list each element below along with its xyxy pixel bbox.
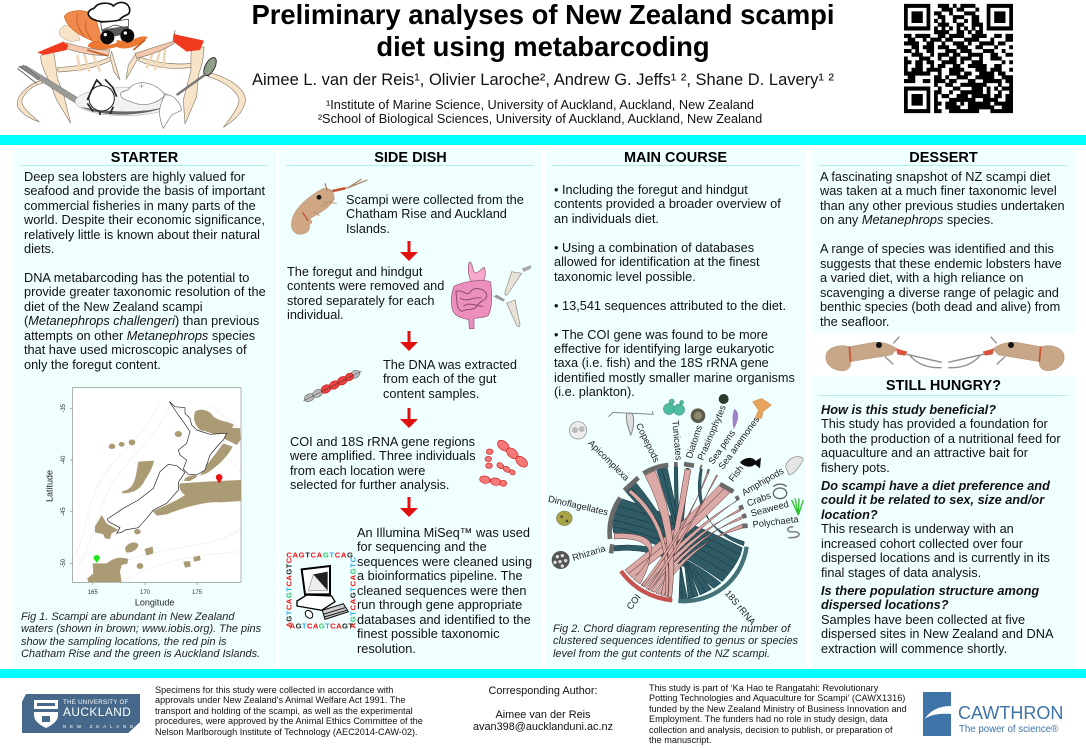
chart: scampi distribution map: 170 bbox=[140, 590, 151, 596]
text: ethics statement: approvals under New Zealand's Animal Welfare Act 1991. The bbox=[155, 695, 405, 705]
chart: scampi distribution map: -45 bbox=[61, 507, 67, 516]
icon: diatom bbox=[691, 408, 705, 423]
cyan divider: bottom bbox=[0, 669, 1086, 678]
chart: chord diagram: 18S rRNA bbox=[723, 588, 758, 627]
text: dessert: A range of species was identified and this bbox=[820, 241, 1054, 256]
heading: main course: MAIN COURSE bbox=[624, 150, 727, 166]
arrow 2 bbox=[400, 331, 418, 351]
text: main course bullets: effective for identifying large eukaryotic bbox=[554, 341, 774, 356]
text: metabarcoding: DNA metabarcoding has the potential to bbox=[24, 270, 249, 285]
text: starter intro: relatively little is known about their natural bbox=[24, 227, 260, 242]
heading: dessert: DESSERT bbox=[909, 150, 978, 166]
text: dessert: the seafloor. bbox=[820, 314, 889, 329]
text: corresponding author: Aimee van der Reis bbox=[495, 709, 591, 721]
text: starter intro: seafood and provide the basis of important bbox=[24, 183, 265, 198]
text: ethics statement bbox=[155, 685, 423, 737]
text: corresponding author bbox=[473, 685, 613, 733]
text: step 5 bbox=[357, 525, 532, 656]
icon: scampi bbox=[291, 178, 368, 235]
chart: scampi distribution map: -40 bbox=[61, 455, 67, 464]
heading: still hungry: STILL HUNGRY? bbox=[886, 378, 1001, 394]
icon: sea anemone bbox=[752, 398, 772, 418]
text: step 4: from each location were bbox=[290, 463, 425, 478]
caption: figure 2 bbox=[553, 623, 798, 660]
text: step 2: stored separately for each bbox=[287, 293, 434, 308]
panel: dessert bbox=[812, 149, 1075, 333]
chart: chord diagram: Apicomplexa bbox=[586, 438, 632, 483]
text: dessert: benthic species (both dead and alive) from bbox=[820, 299, 1060, 314]
text: corresponding author: Corresponding Author: bbox=[488, 685, 597, 697]
chart: chord diagram: Fish bbox=[727, 464, 745, 484]
title: diet using metabarcoding bbox=[376, 31, 710, 62]
chart: chord diagram: Crabs bbox=[745, 490, 773, 509]
logo: New Zealand: NEW ZEALAND bbox=[63, 724, 137, 729]
caption: figure 2: Fig 2. Chord diagram representing the number of bbox=[553, 623, 790, 635]
text: funding statement bbox=[649, 683, 907, 745]
icon: two scampi facing each other bbox=[826, 336, 1064, 371]
logo: University of Auckland bbox=[22, 694, 140, 733]
text: dessert: a varied diet, with a high reliance on bbox=[820, 270, 1023, 285]
text: metabarcoding: that have used microscopic analyses of bbox=[24, 342, 247, 357]
text: step 5: databases and identified to the bbox=[357, 612, 531, 627]
icon: copepod bbox=[608, 411, 653, 435]
chart: chord diagram: Polychaeta bbox=[752, 514, 800, 530]
text: main course bullets: • The COI gene was found to be more bbox=[554, 327, 768, 342]
text: metabarcoding: diet of the New Zealand scampi bbox=[24, 299, 203, 314]
icon: computer with sequence border: AGTCAGTCAGTC bbox=[285, 557, 294, 628]
heading: side dish: SIDE DISH bbox=[374, 150, 447, 166]
text: step 3: from each of the gut bbox=[383, 371, 496, 386]
icon: computer with sequence border bbox=[285, 551, 358, 630]
text: question 1: This study has provided a foundation for bbox=[821, 416, 1048, 431]
text: main course bullets: • Including the foregut and hindgut bbox=[554, 182, 748, 197]
text: main course bullets: taxonomic level possible. bbox=[554, 269, 696, 284]
icon: polychaete bbox=[788, 527, 799, 538]
text: question 2: final stages of data analysis. bbox=[821, 565, 981, 580]
text: question 3: Samples have been collected at five bbox=[821, 612, 1025, 627]
logo wordmark: THE UNIVERSITY OF bbox=[63, 699, 129, 706]
text: step 2: contents were removed and bbox=[287, 278, 444, 293]
text: main course bullets bbox=[554, 182, 795, 399]
caption: figure 1 bbox=[21, 611, 261, 660]
panel: starter bbox=[13, 149, 276, 668]
text: main course bullets: an individuals diet. bbox=[554, 211, 659, 226]
text: step 5: for sequencing and the bbox=[357, 539, 487, 554]
text: metabarcoding: provide greater taxonomic resolution of the bbox=[24, 284, 266, 299]
text: step 1: Scampi were collected from the bbox=[346, 192, 524, 207]
heading rule bbox=[286, 165, 534, 166]
text: step 1: Chatham Rise and Auckland bbox=[346, 206, 507, 221]
text: funding statement: funded by the New Zealand Ministry of Business Innovation and bbox=[649, 704, 907, 714]
caption: figure 1: Fig 1. Scampi are abundant in New Zealand bbox=[21, 611, 234, 623]
text: question 1: aquaculture and an attractive bait for bbox=[821, 445, 1028, 460]
chart: chord diagram: Rhizaria bbox=[571, 543, 607, 563]
text: main course bullets: • Using a combination of databases bbox=[554, 240, 754, 255]
text: step 3 bbox=[383, 357, 517, 401]
chart: scampi distribution map: 175 bbox=[192, 590, 203, 596]
text: dessert: on any Metanephrops species. bbox=[820, 212, 994, 227]
logo: Cawthron bbox=[923, 692, 1063, 736]
heading rule bbox=[819, 395, 1067, 396]
text: ethics statement: Nelson Marlborough Institute of Technology (AEC2014-CAW-02). bbox=[155, 727, 418, 737]
icon: apicomplexa bbox=[569, 422, 587, 439]
chart: chord diagram: Prasinophytes bbox=[696, 403, 728, 462]
heading: starter: STARTER bbox=[111, 150, 178, 166]
text: metabarcoding: (Metanephrops challengeri) than previous bbox=[24, 313, 259, 328]
text: metabarcoding: only the foregut content. bbox=[24, 357, 161, 372]
text: step 5: finest possible taxonomic bbox=[357, 626, 499, 641]
icon: amplified DNA bbox=[479, 440, 528, 487]
text: dessert: than any other previous studies undertaken bbox=[820, 198, 1065, 213]
text: step 4: selected for further analysis. bbox=[290, 477, 449, 492]
logo: Auckland: AUCKLAND bbox=[63, 705, 131, 719]
text: step 2: individual. bbox=[287, 307, 344, 322]
icon: amphipod bbox=[786, 457, 803, 475]
text: question 3 bbox=[821, 583, 1054, 656]
icon: crab bbox=[773, 484, 787, 499]
affiliations: ¹Institute of Marine Science, University of Auckland, Auckland, New Zealand bbox=[326, 97, 754, 112]
text: corresponding author: avan398@aucklanduni.ac.nz bbox=[473, 721, 613, 733]
chart: chord diagram: Diatoms bbox=[684, 424, 704, 460]
chart: chord diagram: Tunicates bbox=[670, 420, 684, 461]
text: funding statement: Potting Technologies and Aquaculture for Scampi’ (CAWX1316) bbox=[649, 693, 905, 703]
text: funding statement: Employment. The funders had no role in study design, data bbox=[649, 714, 888, 724]
heading rule bbox=[20, 165, 268, 166]
icon: radiolarian bbox=[552, 551, 570, 569]
icon: dinoflagellate bbox=[556, 511, 572, 526]
icon: gut and sample tubes bbox=[451, 262, 532, 329]
caption: figure 2: level from the gut contents of the NZ scampi. bbox=[553, 648, 770, 660]
icon: fish bbox=[740, 458, 761, 468]
heading rule bbox=[551, 165, 799, 166]
icon: computer with sequence border: AGTCAGTCAGT bbox=[290, 621, 353, 630]
caption: figure 1: show the sampling locations, the red pin is bbox=[21, 636, 226, 648]
text: main course bullets: identified mostly smaller marine organisms bbox=[554, 370, 795, 385]
North Island outline bbox=[169, 402, 227, 475]
chart: chord diagram: Copepods bbox=[634, 421, 662, 464]
text: question 2: Do scampi have a diet preference and bbox=[821, 478, 1050, 493]
affiliations: ²School of Biological Sciences, University of Auckland, Auckland, New Zealand bbox=[318, 111, 762, 126]
text: dessert: scavenging a diverse range of pelagic and bbox=[820, 285, 1059, 300]
text: main course bullets: contents provided a broader overview of bbox=[554, 196, 781, 211]
chart: chord diagram: COI bbox=[625, 592, 643, 612]
text: starter intro: world. Despite their economic significance, bbox=[24, 212, 265, 227]
panel: still hungry bbox=[812, 376, 1075, 668]
text: question 2: dispersed locations and is currently in its bbox=[821, 550, 1050, 565]
text: step 3: The DNA was extracted bbox=[383, 357, 517, 372]
icon: sea pen bbox=[732, 409, 738, 429]
logo crest bbox=[34, 700, 58, 728]
affiliations bbox=[318, 97, 762, 126]
icon: tunicates bbox=[663, 399, 685, 415]
text: step 4 bbox=[290, 434, 475, 492]
chart: chord diagram bbox=[547, 394, 804, 627]
arrow 1 bbox=[400, 241, 418, 261]
cyan divider: top bbox=[0, 135, 1086, 145]
illustration: chef scampi with fork, spoon and plate bbox=[16, 2, 246, 129]
text: question 3: dispersed sites in New Zealand and DNA bbox=[821, 626, 1053, 641]
text: funding statement: collection and analysis, decision to publish, or preparation of bbox=[649, 725, 892, 735]
text: main course bullets: allowed for identification at the finest bbox=[554, 254, 760, 269]
heading rule bbox=[819, 165, 1067, 166]
text: step 4: were amplified. Three individuals bbox=[290, 448, 475, 463]
chart: scampi distribution map: Longitude bbox=[135, 598, 174, 608]
text: metabarcoding: attempts on other Metanephrops species bbox=[24, 328, 255, 343]
text: question 2: increased cohort collected over four bbox=[821, 536, 1023, 551]
chords to COI bbox=[614, 469, 743, 598]
chart: chord diagram: Sea pens bbox=[706, 428, 737, 466]
text: metabarcoding bbox=[24, 270, 266, 372]
text: ethics statement: procedures, were approved by the Animal Ethics Committee of the bbox=[155, 716, 423, 726]
QR code bbox=[904, 4, 1013, 114]
arrow 4 bbox=[400, 497, 418, 517]
text: step 5: cleaned sequences were then bbox=[357, 583, 526, 598]
text: question 3: Is there population structure among bbox=[821, 583, 1039, 598]
South Island outline bbox=[107, 464, 185, 533]
logo name: CAWTHRON bbox=[958, 703, 1063, 723]
icon: prasinophyte bbox=[719, 394, 729, 404]
text: dessert: was taken at a much finer taxonomic level bbox=[820, 183, 1057, 198]
icon: DNA helix bbox=[303, 370, 362, 402]
chart: scampi distribution map: -35 bbox=[61, 403, 67, 413]
text: dessert: A fascinating snapshot of NZ scampi diet bbox=[820, 169, 1050, 184]
text: question 1 bbox=[821, 402, 1061, 475]
text: dessert: suggests that these endemic lobsters have bbox=[820, 256, 1062, 271]
arrow 3 bbox=[400, 408, 418, 428]
icon: seaweed bbox=[792, 498, 803, 515]
text: step 5: sequences were cleaned using bbox=[357, 554, 532, 569]
text: starter intro: Deep sea lobsters are highly valued for bbox=[24, 169, 245, 184]
chords to 18S rRNA bbox=[613, 467, 744, 601]
text: starter intro: diets. bbox=[24, 241, 54, 256]
text: question 2: could it be related to sex, size and/or bbox=[821, 492, 1044, 507]
chart: scampi distribution map bbox=[45, 387, 242, 608]
chart: chord diagram: Amphipods bbox=[740, 466, 786, 498]
text: dessert bbox=[820, 169, 1065, 329]
chart: scampi distribution map: -50 bbox=[61, 558, 67, 568]
sector arcs bbox=[610, 464, 748, 553]
text: question 2: This research is underway with an bbox=[821, 521, 1014, 536]
pin: Chatham Rise bbox=[216, 474, 222, 484]
text: question 1: How is this study beneficial? bbox=[821, 402, 996, 417]
text: funding statement: This study is part of ‘Ka Hao te Rangatahi: Revolutionary bbox=[649, 683, 878, 693]
chart: chord diagram: Seaweed bbox=[750, 499, 790, 519]
text: step 1: Islands. bbox=[346, 221, 390, 236]
chart: chord diagram: Sea anemones bbox=[717, 414, 762, 471]
text: main course bullets: taxa (i.e. fish) and the 18S rRNA gene bbox=[554, 355, 769, 370]
text: question 2: location? bbox=[821, 507, 878, 522]
text: step 2 bbox=[287, 264, 444, 322]
icon: computer with sequence border: AGTCAGTCAGTC bbox=[349, 557, 358, 628]
panel: main course bbox=[546, 149, 805, 668]
chart: scampi distribution map: Latitude bbox=[45, 470, 55, 502]
text: question 2 bbox=[821, 478, 1050, 580]
logo tagline: The power of science® bbox=[959, 724, 1058, 735]
text: main course bullets: (i.e. plankton). bbox=[554, 384, 635, 399]
text: step 5: run through gene appropriate bbox=[357, 597, 522, 612]
caption: figure 2: clustered sequences identified to genus or species bbox=[553, 635, 798, 647]
text: ethics statement: transport and holding of the scampi, as well as the experimental bbox=[155, 706, 413, 716]
text: question 1: both the production of a nutritional feed for bbox=[821, 431, 1061, 446]
text: question 1: fishery pots. bbox=[821, 460, 890, 475]
text: step 5: An Illumina MiSeq™ was used bbox=[357, 525, 530, 540]
caption: figure 1: waters (shown in brown; www.iobis.org). The pins bbox=[21, 623, 261, 635]
text: step 2: The foregut and hindgut bbox=[287, 264, 422, 279]
text: funding statement: the manuscript. bbox=[649, 735, 711, 745]
caption: figure 1: Chatham Rise and the green is Auckland Islands. bbox=[21, 648, 260, 660]
chart: scampi distribution map: 165 bbox=[88, 590, 98, 596]
title bbox=[251, 0, 835, 62]
chart: chord diagram: Dinoflagellates bbox=[547, 494, 609, 517]
text: step 5: a bioinformatics pipeline. The bbox=[357, 568, 523, 583]
authors: Aimee L. van der Reis¹, Olivier Laroche², Andrew G. Jeffs¹ ², Shane D. Lavery¹ ² bbox=[252, 71, 834, 89]
text: main course bullets: • 13,541 sequences attributed to the diet. bbox=[554, 298, 786, 313]
panel: side dish bbox=[279, 149, 542, 668]
logo mark bbox=[923, 692, 951, 736]
text: starter intro: commercial fisheries in many parts of the bbox=[24, 198, 256, 213]
text: question 3: dispersed locations? bbox=[821, 597, 949, 612]
text: step 5: resolution. bbox=[357, 641, 416, 656]
pin: Auckland Islands bbox=[93, 555, 100, 563]
text: ethics statement: Specimens for this study were collected in accordance with bbox=[155, 685, 393, 695]
icon: computer with sequence border: CAGTCAGTCAG bbox=[286, 551, 353, 560]
text: question 3: extraction will commence shortly. bbox=[821, 641, 1007, 656]
text: starter intro bbox=[24, 169, 265, 256]
text: step 1 bbox=[346, 192, 524, 236]
text: step 3: content samples. bbox=[383, 386, 479, 401]
text: step 4: COI and 18S rRNA gene regions bbox=[290, 434, 475, 449]
